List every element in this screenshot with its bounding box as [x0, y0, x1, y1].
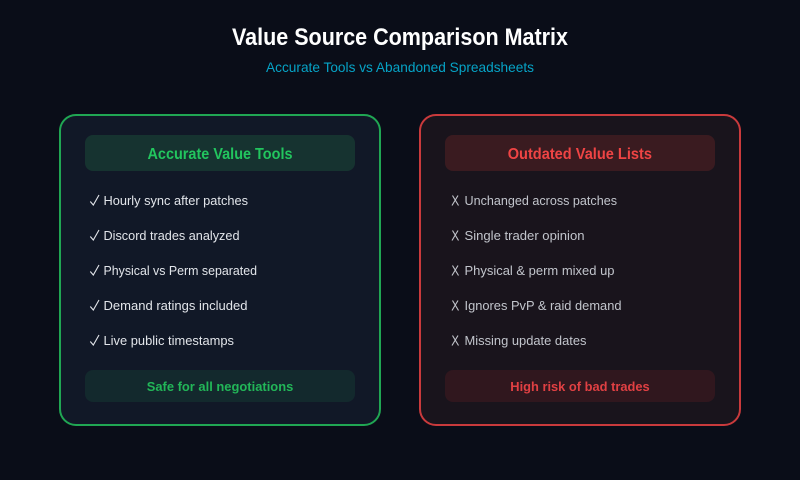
panel verdict [445, 370, 715, 402]
panel heading [85, 135, 355, 171]
flaw: ignores demand: Ignores PvP & raid demand [464, 298, 622, 313]
panel heading: Outdated Value Lists [508, 146, 652, 163]
flaw: single opinion: Single trader opinion [464, 228, 584, 243]
panel heading: Accurate Value Tools [148, 146, 293, 163]
panel verdict [85, 370, 355, 402]
feature: discord trades: Discord trades analyzed [104, 228, 240, 243]
feature: physical vs perm: Physical vs Perm separated [104, 263, 257, 278]
panel: accurate value tools [60, 115, 380, 425]
flaw: missing dates: Missing update dates [464, 333, 587, 348]
feature: demand ratings: Demand ratings included [104, 298, 248, 313]
feature: live timestamps: Live public timestamps [104, 333, 234, 348]
title: Value Source Comparison Matrix [232, 24, 569, 51]
flaw: mixed up: Physical & perm mixed up [464, 263, 614, 278]
panel background [420, 115, 740, 425]
panel verdict: Safe for all negotiations [147, 379, 293, 394]
feature: hourly sync: Hourly sync after patches [104, 193, 248, 208]
panel verdict: High risk of bad trades [510, 379, 650, 394]
panel background [60, 115, 380, 425]
subtitle: Accurate Tools vs Abandoned Spreadsheets [266, 59, 534, 75]
flaw: unchanged: Unchanged across patches [464, 193, 617, 208]
panel heading [445, 135, 715, 171]
panel: outdated value lists [420, 115, 740, 425]
